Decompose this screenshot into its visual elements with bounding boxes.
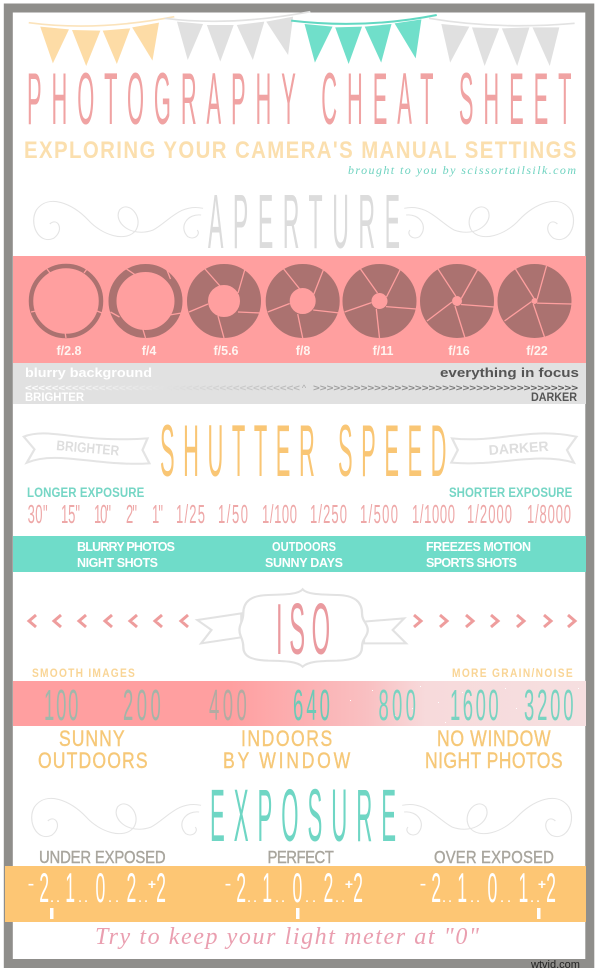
iso usage labels: NO WINDOW — [437, 727, 551, 752]
handwritten tip: Try to keep your light meter at "0" — [95, 924, 480, 950]
shutter speed values: 1/1000 — [412, 500, 455, 529]
shutter band text: SUNNY DAYS — [265, 556, 343, 570]
watermark: wtvid.com — [530, 959, 580, 971]
aperture swirl ornaments — [34, 201, 574, 240]
panel: exposure band — [5, 866, 586, 922]
iso band grain texture — [350, 686, 579, 723]
shutter band text: FREEZES MOTION — [426, 540, 531, 554]
exposure heading: EXPOSURE — [210, 775, 396, 857]
aperture heading: APERTURE — [208, 180, 400, 266]
label: under exposed: UNDER EXPOSED — [39, 848, 166, 867]
label: everything in focus: everything in focus — [440, 365, 579, 380]
iris f/16 — [427, 269, 494, 338]
aperture irises — [31, 266, 572, 338]
f-stop labels: f/2.8 — [56, 344, 82, 358]
shutter speed values: 2" — [126, 500, 137, 529]
shutter speed values: 1" — [152, 500, 163, 529]
label: perfect: PERFECT — [268, 848, 334, 867]
meter: perfect: - — [225, 873, 231, 895]
iso usage labels: NIGHT PHOTOS — [425, 749, 563, 774]
iso values: 400 — [209, 681, 247, 730]
tick: perfect — [296, 908, 300, 919]
ribbon: brighter — [24, 433, 149, 464]
shutter speed values: 1/50 — [218, 500, 248, 529]
label: smooth images: SMOOTH IMAGES — [32, 667, 135, 680]
centre mark: ^ — [302, 383, 307, 393]
title: PHOTOGRAPHY CHEAT SHEET — [27, 59, 571, 140]
f-stop labels: f/5.6 — [213, 344, 239, 358]
ribbon: darker — [451, 433, 577, 463]
shutter speed values: 1/250 — [310, 500, 347, 529]
shutter speed values: 15" — [61, 500, 80, 529]
label: over exposed: OVER EXPOSED — [434, 848, 554, 867]
meter: perfect: 2102 — [236, 864, 333, 911]
shutter band text: BLURRY PHOTOS — [77, 540, 175, 554]
right chevrons — [414, 615, 575, 627]
swirl left — [34, 201, 203, 240]
label: darker: DARKER — [531, 390, 577, 404]
f-stop labels: f/8 — [296, 344, 310, 358]
iris f/22 — [504, 266, 572, 337]
meter: under exposed: ........ — [50, 893, 148, 905]
iris f/11 — [344, 269, 416, 338]
label: brighter: BRIGHTER — [25, 390, 84, 404]
shutter band text: NIGHT SHOTS — [77, 556, 158, 570]
shutter band text: OUTDOORS — [272, 540, 336, 554]
label: shorter exposure: SHORTER EXPOSURE — [449, 485, 572, 500]
tick: under exposed — [50, 908, 54, 919]
shutter speed values: 1/8000 — [527, 500, 571, 529]
iso values: 1600 — [450, 681, 499, 730]
iso heading: ISO — [276, 590, 330, 670]
ribbon text: darker: DARKER — [488, 438, 549, 458]
iso values: 640 — [293, 681, 330, 730]
panel: depth of field band — [13, 363, 586, 404]
shutter band text: SPORTS SHOTS — [426, 556, 517, 570]
bunting: yellow flags — [29, 17, 174, 66]
iso usage labels: BY WINDOW — [223, 749, 350, 774]
shutter speed values: 1/25 — [176, 500, 205, 529]
panel: aperture band — [13, 256, 586, 363]
iso usage labels: SUNNY — [59, 727, 125, 752]
iso usage labels: OUTDOORS — [38, 749, 148, 774]
iris f/4 — [110, 268, 182, 338]
iso plaque — [197, 589, 406, 667]
label: more grain: MORE GRAIN/NOISE — [452, 667, 573, 680]
exposure swirl ornaments — [32, 798, 572, 837]
bunting: gray flags right — [429, 18, 575, 66]
f-stop labels: f/11 — [373, 344, 393, 358]
iris f/8 — [268, 269, 340, 338]
tick: over exposed — [537, 908, 540, 919]
iso values — [44, 681, 574, 730]
meter: under exposed: 2 — [156, 864, 166, 911]
iso usage labels — [38, 727, 563, 774]
swirl right — [404, 201, 574, 240]
iso usage labels: INDOORS — [241, 727, 332, 752]
meter: over exposed: ........ — [442, 893, 540, 905]
label: longer exposure: LONGER EXPOSURE — [27, 485, 144, 500]
subtitle: EXPLORING YOUR CAMERA'S MANUAL SETTINGS — [24, 136, 577, 163]
label: blurry background: blurry background — [25, 365, 152, 380]
shutter band text — [77, 540, 531, 570]
meter: perfect: ........ — [247, 893, 345, 905]
shutter speed values: 1/500 — [360, 500, 398, 529]
meter: over exposed: - — [420, 873, 426, 895]
ribbon text: brighter: BRIGHTER — [56, 437, 120, 458]
left chevrons — [29, 615, 188, 627]
f-stop labels: f/4 — [142, 344, 156, 358]
iris f/2.8 — [31, 266, 102, 338]
bunting: teal flags — [291, 15, 437, 64]
iso values: 800 — [378, 681, 416, 730]
left arrows: <<<<<<<<<<<<<<<<<<<<<<<<<<<<<<<<<<<<<<<<< — [25, 383, 300, 393]
shutter speed values: 1/100 — [262, 500, 297, 529]
meter: under exposed: + — [148, 876, 156, 892]
meter: perfect: 2 — [353, 864, 363, 911]
right arrows: >>>>>>>>>>>>>>>>>>>>>>>>>>>>>>>>>>>>>>> — [313, 383, 578, 393]
meter: over exposed: 2101 — [431, 864, 528, 911]
meter: under exposed: 2102 — [39, 864, 136, 911]
shutter speed values: 30" — [28, 500, 48, 529]
meter: over exposed: + — [538, 876, 546, 892]
shutter speed heading: SHUTTER SPEED — [160, 411, 447, 492]
meter: under exposed: - — [28, 873, 34, 895]
swirl right — [402, 798, 572, 837]
bunting: gray flags left — [165, 12, 310, 62]
shutter speed values: 10" — [94, 500, 111, 529]
iris f/5.6 — [189, 269, 261, 338]
f-stop labels: f/16 — [448, 344, 470, 358]
f-stop labels: f/22 — [526, 344, 548, 358]
f-stop labels — [56, 344, 548, 358]
bunting banner — [29, 12, 575, 66]
panel: iso band — [13, 681, 586, 726]
iso values: 200 — [123, 681, 161, 730]
shutter speed values: 1/2000 — [467, 500, 512, 529]
meter: over exposed: 2 — [546, 864, 556, 911]
iso values: 100 — [44, 681, 78, 730]
meter: perfect: + — [345, 876, 353, 892]
panel: shutter band — [13, 536, 586, 572]
shutter speed values — [28, 500, 571, 529]
iso values: 3200 — [524, 681, 574, 730]
swirl left — [32, 798, 201, 837]
credit line: brought to you by scissortailsilk.com — [348, 163, 576, 177]
